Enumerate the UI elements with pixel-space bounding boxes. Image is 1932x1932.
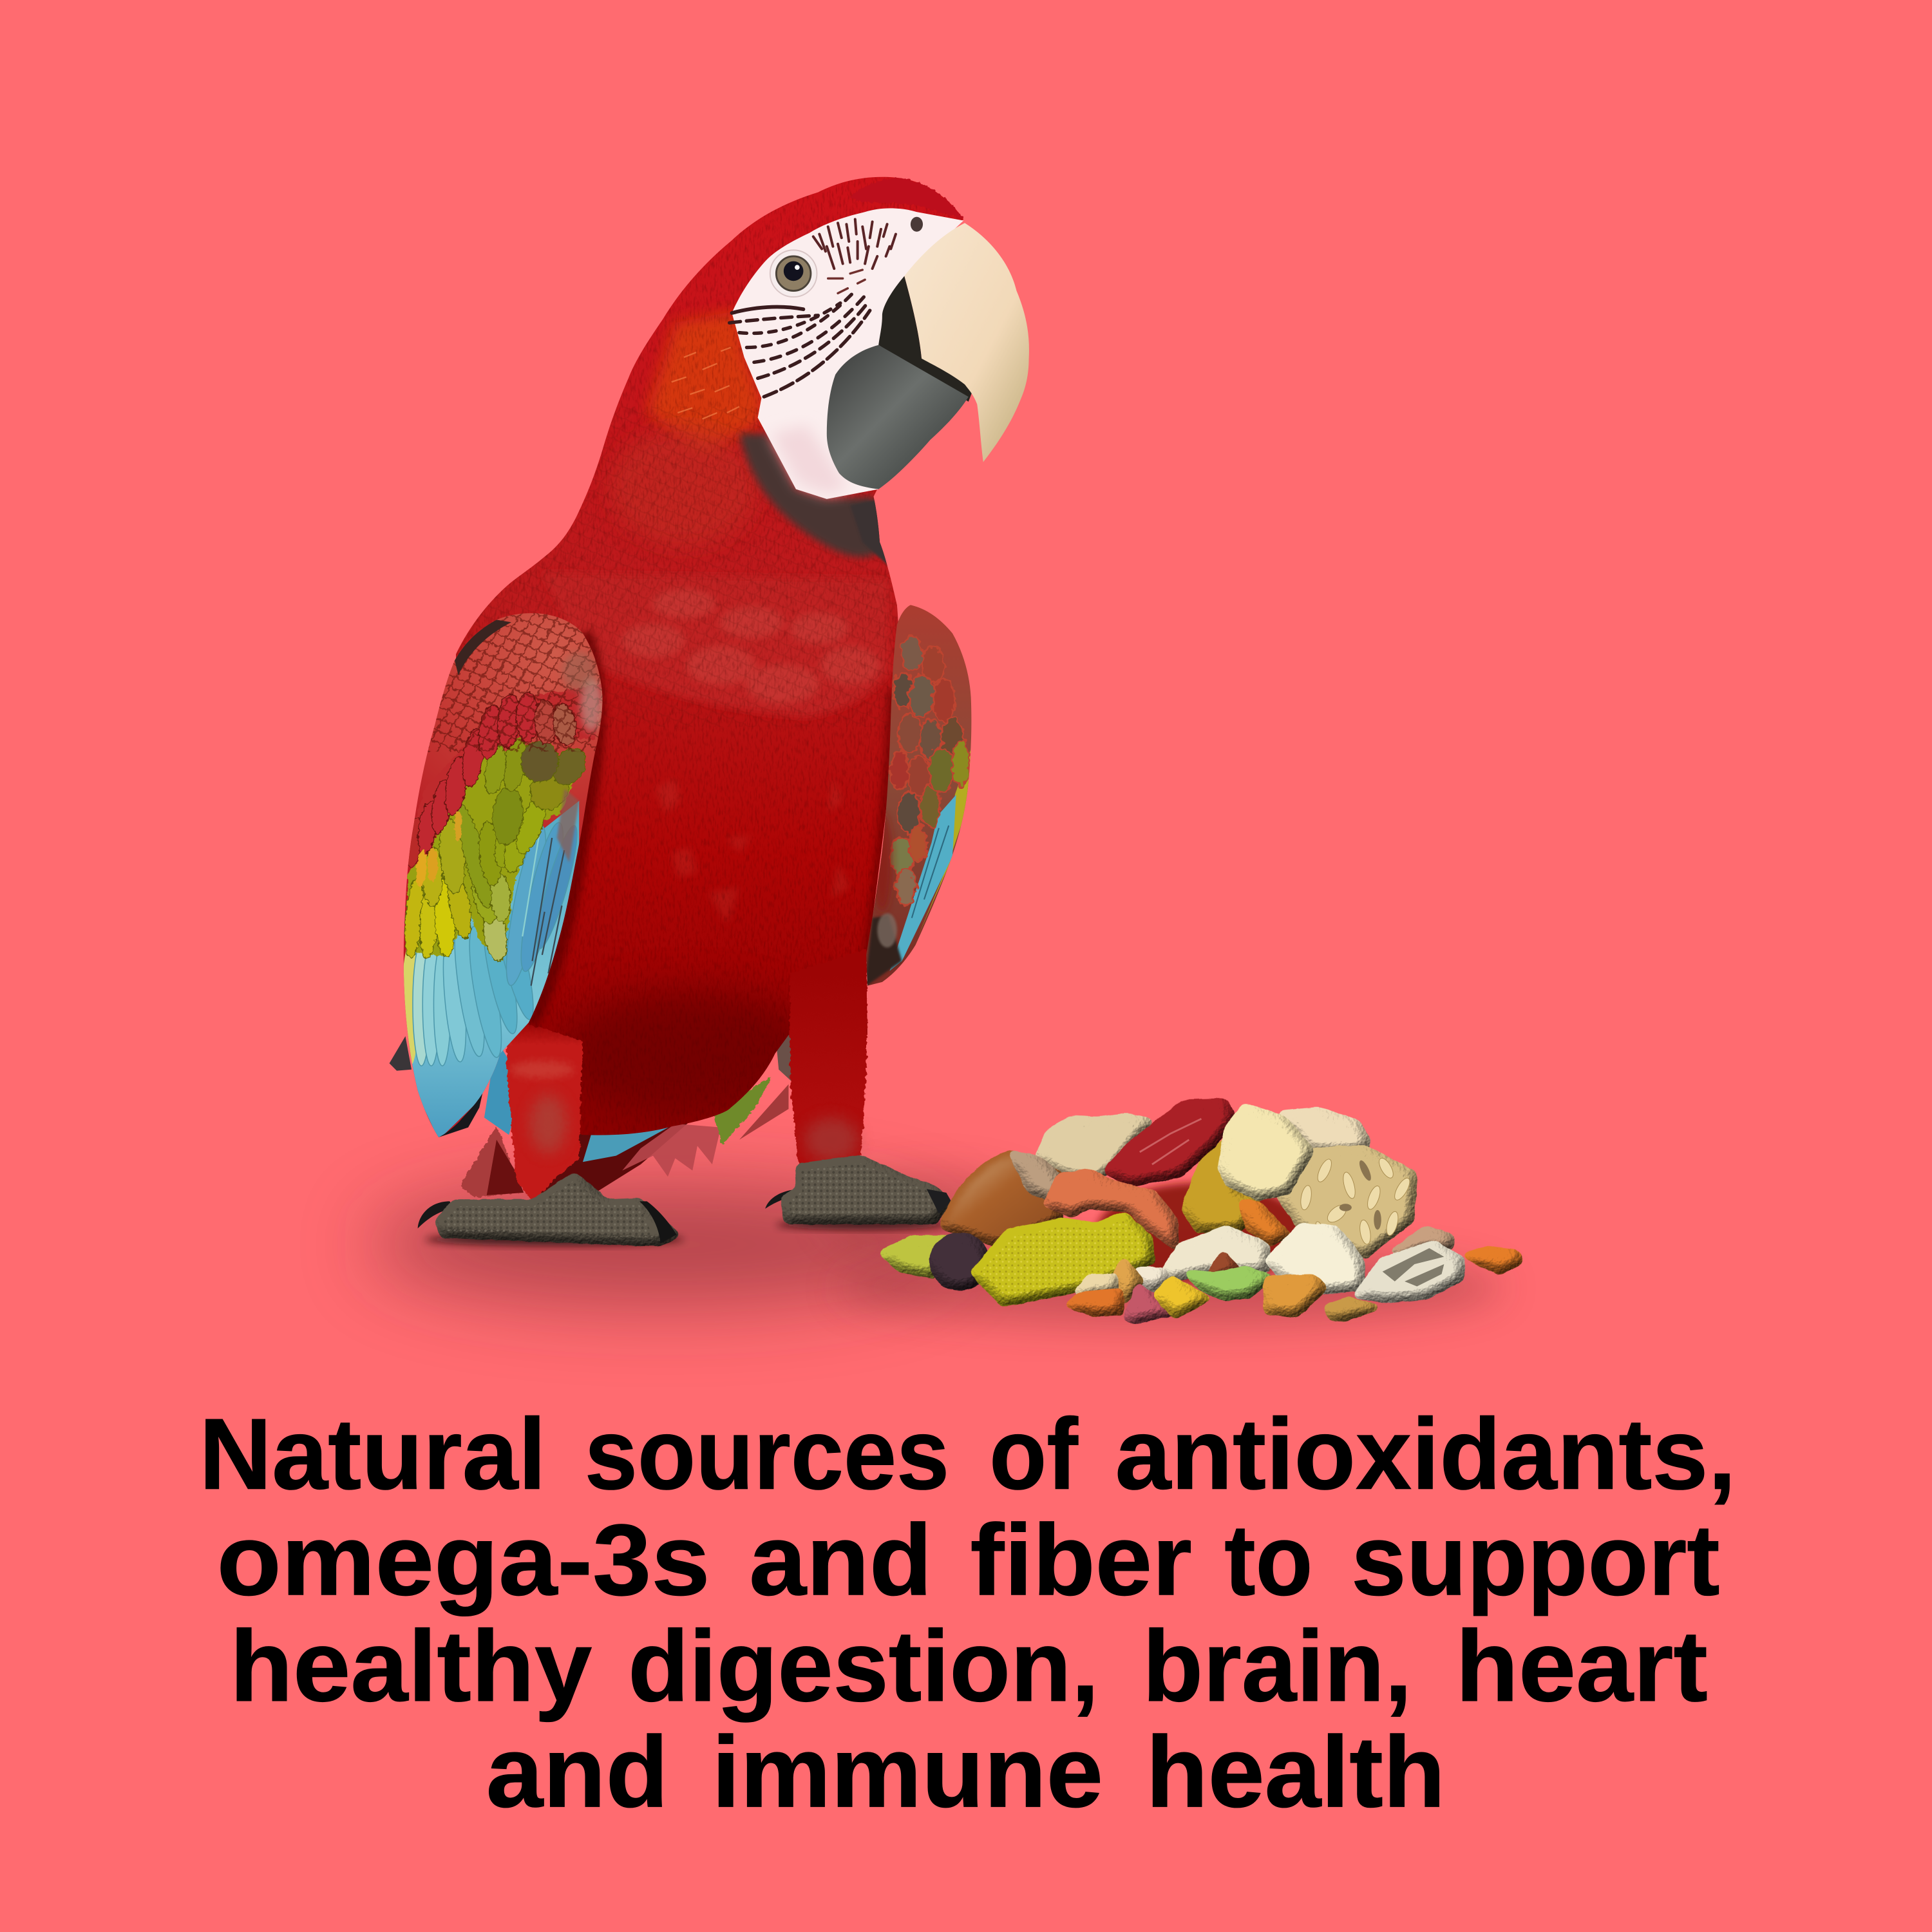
caption text: of <box>989 1398 1079 1511</box>
blue flight feathers <box>402 820 584 1066</box>
red covert feathers <box>403 684 603 887</box>
tan nut <box>1037 1116 1150 1180</box>
food pile <box>882 1101 1520 1321</box>
upper beak <box>904 223 1029 462</box>
dark berry <box>933 1236 987 1287</box>
crown red edge <box>850 178 963 220</box>
speckled seed <box>1394 1229 1452 1252</box>
banana chip <box>1221 1106 1311 1198</box>
orange curl <box>1046 1172 1175 1247</box>
caption text: to <box>1224 1504 1312 1616</box>
face stripes <box>730 220 896 397</box>
left foot <box>418 1175 676 1243</box>
caption text: and <box>486 1716 668 1828</box>
body and head silhouette <box>444 173 986 1146</box>
caption text: support <box>1351 1504 1720 1616</box>
caption text: brain, <box>1142 1610 1412 1723</box>
caption text: health <box>1146 1716 1445 1828</box>
floor shadow <box>370 1172 1503 1325</box>
olive and yellow feathers <box>402 735 592 962</box>
caption text: sources <box>585 1398 949 1511</box>
right leg <box>790 949 867 1167</box>
caption text: healthy <box>230 1610 592 1723</box>
caption text: and <box>749 1504 933 1616</box>
tail and back feathers <box>390 1004 795 1198</box>
caption text: antioxidants, <box>1115 1398 1736 1511</box>
mustard sponge <box>1184 1140 1258 1229</box>
sunflower seed <box>1357 1243 1463 1300</box>
parrot <box>390 173 1029 1243</box>
left wing <box>403 613 603 1137</box>
big yellow piece <box>973 1215 1152 1303</box>
caption text: fiber <box>971 1504 1192 1616</box>
red pepper <box>1106 1101 1233 1184</box>
almond <box>1282 1110 1368 1151</box>
lower beak <box>827 345 969 489</box>
right wing <box>862 601 976 989</box>
right foot <box>765 1158 951 1221</box>
hazelnut <box>944 1153 1059 1244</box>
green yellow piece <box>882 1238 949 1275</box>
caption text <box>199 1398 1736 1828</box>
caption text: Natural <box>199 1398 546 1511</box>
small pieces <box>1068 1255 1376 1321</box>
white ball <box>1268 1226 1361 1291</box>
seed cluster <box>1279 1148 1414 1256</box>
face patch <box>730 208 963 499</box>
caption text: heart <box>1455 1610 1708 1723</box>
orange crumb right <box>1466 1249 1520 1271</box>
pistachio <box>1163 1229 1267 1279</box>
orange chunk <box>1241 1202 1287 1243</box>
eye <box>770 250 817 297</box>
nostril <box>911 217 923 232</box>
beak mouth shadow <box>878 276 978 402</box>
left leg <box>504 1016 583 1202</box>
caption text: omega-3s <box>217 1504 710 1616</box>
caption text: immune <box>712 1716 1103 1828</box>
caption text: digestion, <box>628 1610 1099 1723</box>
